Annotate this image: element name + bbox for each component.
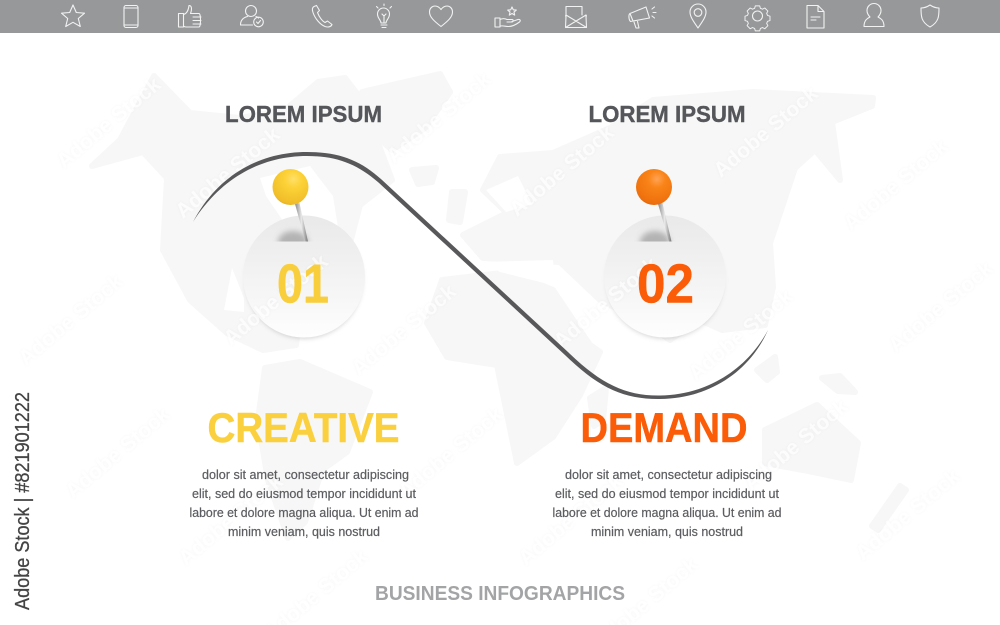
title: demand: DEMAND <box>580 404 748 451</box>
text block: left: dolor sit amet, consectetur adipiscing <box>202 468 409 482</box>
vertical stock id: Adobe Stock | #821901222 <box>12 392 34 610</box>
number 02: 02 <box>637 252 694 314</box>
stock watermarks: Adobe Stock <box>174 470 288 570</box>
stock watermarks: Adobe Stock <box>839 135 953 235</box>
stock watermarks: Adobe Stock <box>684 285 798 385</box>
text block: right: minim veniam, quis nostrud <box>591 525 743 539</box>
orange push pin <box>636 169 672 242</box>
icon: star <box>62 5 84 26</box>
icon: telephone <box>312 6 332 27</box>
disc 02 <box>604 216 726 338</box>
icon: megaphone <box>629 7 656 28</box>
text block: right: labore et dolore magna aliqua. Ut enim ad <box>552 506 782 520</box>
icon: thumbs up <box>178 6 201 27</box>
disc 01 <box>243 216 365 338</box>
icon: map pin <box>690 4 706 28</box>
number 01: 01 <box>277 252 329 314</box>
text block: right: dolor sit amet, consectetur adipiscing <box>565 468 772 482</box>
icon: heart <box>430 6 452 26</box>
icon: user with check <box>240 6 263 27</box>
stock watermarks: Adobe Stock <box>61 403 175 503</box>
stock watermarks: Adobe Stock <box>851 465 965 565</box>
yellow push pin <box>272 169 308 242</box>
stock watermarks: Adobe Stock <box>549 253 663 353</box>
stock watermarks: Adobe Stock <box>884 257 998 357</box>
stock watermarks: Adobe Stock <box>514 470 628 570</box>
text block: left: elit, sed do eiusmod tempor incididunt ut <box>192 487 417 501</box>
icon: shield <box>921 5 939 27</box>
text block: left: labore et dolore magna aliqua. Ut enim ad <box>190 506 419 520</box>
icon: person <box>864 4 884 27</box>
top icon bar <box>0 0 1000 33</box>
stock watermarks: Adobe Stock <box>505 121 619 221</box>
icon: hand holding star <box>495 7 520 27</box>
stock watermarks: Adobe Stock <box>347 280 461 380</box>
stock watermarks: Adobe Stock <box>382 68 496 168</box>
footer title: BUSINESS INFOGRAPHICS <box>375 583 625 605</box>
icon: gear <box>745 6 770 31</box>
title: creative: CREATIVE <box>208 404 400 451</box>
text block: left <box>190 468 419 539</box>
text block: left: minim veniam, quis nostrud <box>228 525 380 539</box>
icon: smartphone <box>124 6 138 28</box>
icon: light bulb <box>376 4 392 28</box>
icon: document <box>807 6 824 28</box>
background world map <box>92 74 906 538</box>
icon: open envelope <box>566 6 586 28</box>
map gaps <box>224 166 556 312</box>
heading: left: LOREM IPSUM <box>225 101 382 127</box>
stock watermarks: Adobe Stock <box>219 250 333 350</box>
curved wave line <box>193 152 768 399</box>
stock watermarks: Adobe Stock <box>171 123 285 223</box>
text block: right: elit, sed do eiusmod tempor incididunt ut <box>555 487 780 501</box>
stock watermarks: Adobe Stock <box>739 395 853 495</box>
heading: right: LOREM IPSUM <box>588 101 746 127</box>
stock watermarks: Adobe Stock <box>14 270 128 370</box>
stock watermarks: Adobe Stock <box>709 82 823 182</box>
stock watermarks: Adobe Stock <box>52 73 166 173</box>
text block: right <box>552 468 782 539</box>
stock watermarks: Adobe Stock <box>394 403 508 503</box>
